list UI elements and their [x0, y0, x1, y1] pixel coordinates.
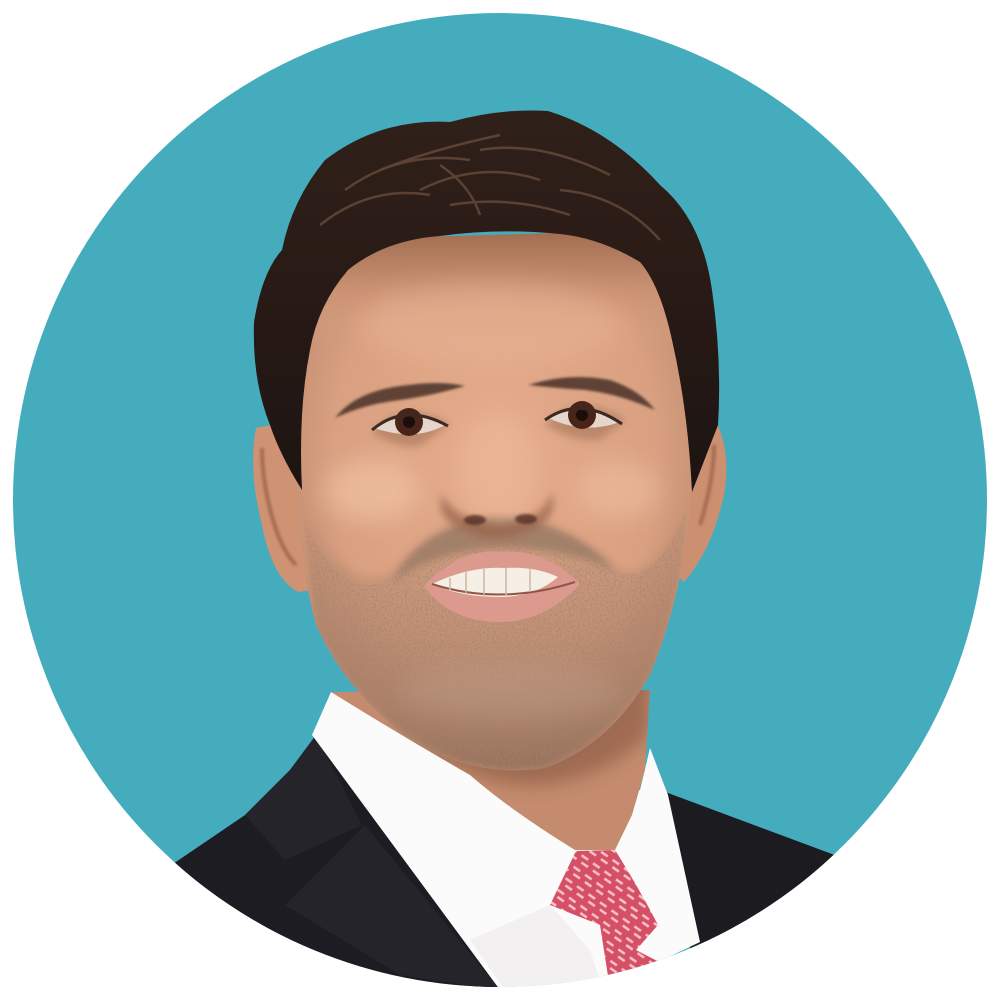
- neck shadow: [398, 690, 650, 792]
- cheek highlights: [324, 458, 420, 522]
- forehead highlight: [371, 280, 608, 344]
- face: [298, 230, 692, 771]
- forehead shading: [340, 233, 652, 300]
- moustache: [392, 515, 618, 582]
- red tie: [550, 850, 665, 976]
- right eye: [545, 401, 625, 440]
- stubble grain: [304, 510, 686, 771]
- left eye: [372, 408, 450, 446]
- left eyebrow: [335, 383, 465, 418]
- hair: [254, 110, 719, 492]
- hair highlights: [320, 135, 660, 240]
- chin patch: [421, 675, 600, 711]
- right eyebrow: [528, 377, 655, 410]
- mouth: [424, 552, 580, 622]
- nose: [441, 415, 553, 539]
- right ear: [680, 426, 726, 582]
- left ear: [253, 425, 312, 592]
- person: [170, 110, 840, 1000]
- stubble: [312, 540, 680, 770]
- neck: [331, 690, 650, 850]
- white shirt collar: [312, 692, 700, 990]
- suit jacket: [170, 735, 840, 1000]
